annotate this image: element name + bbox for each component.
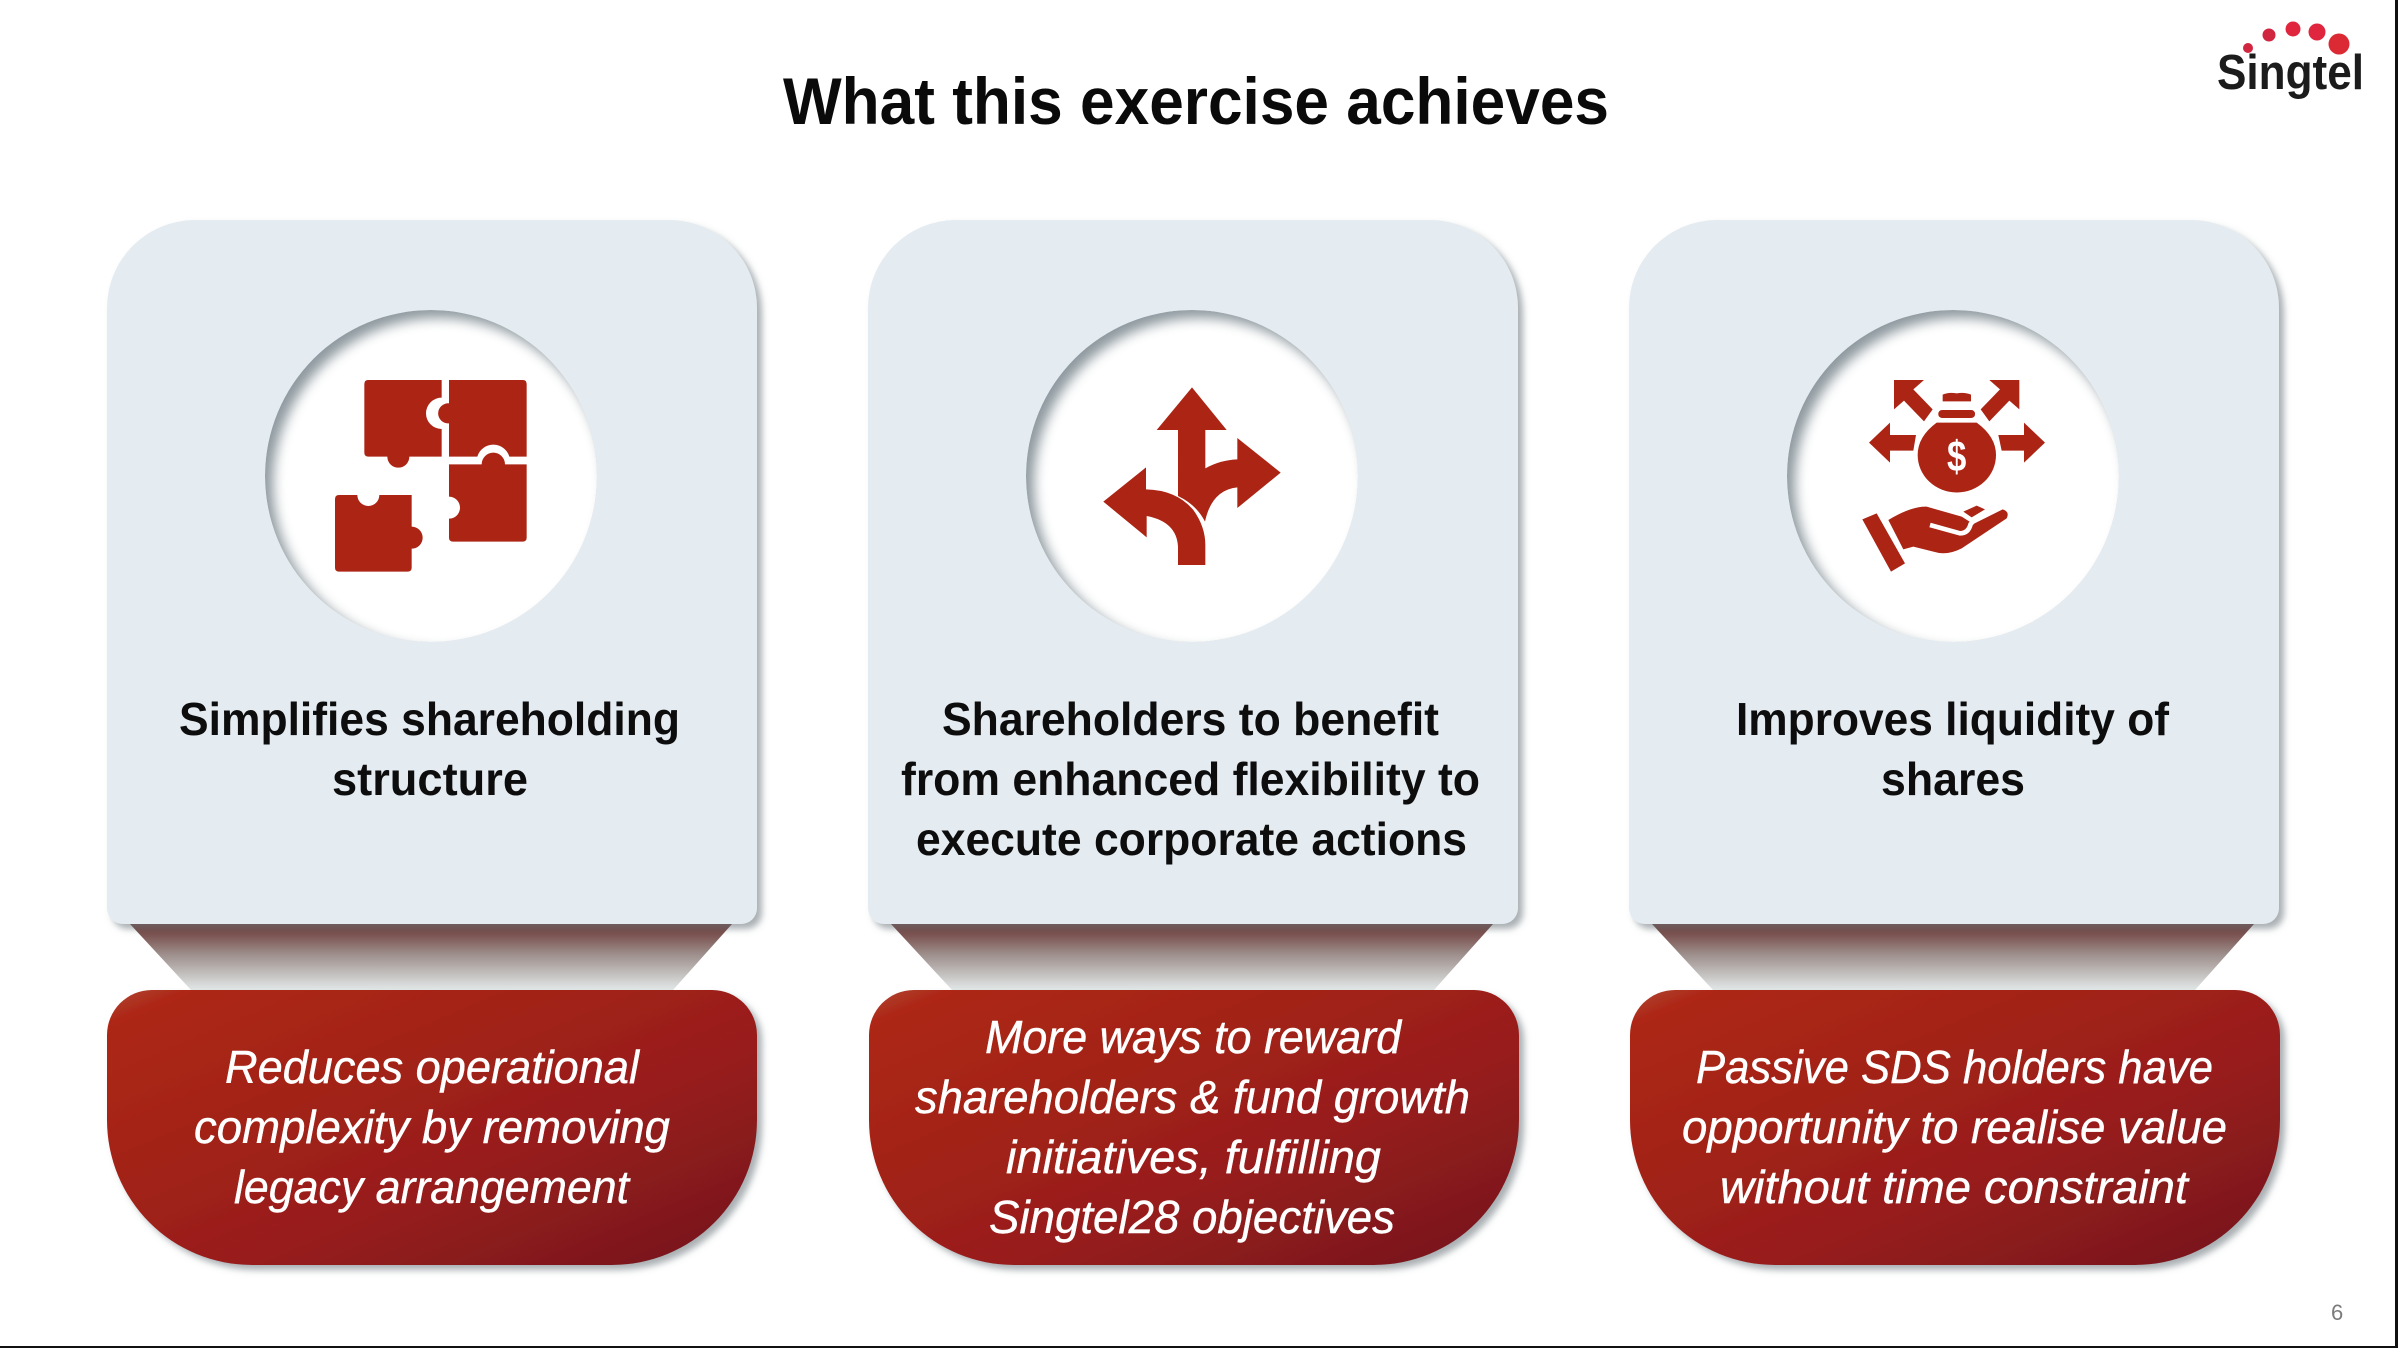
panel: improves liquidity [1629,220,2280,1265]
callout text 1 [194,1041,670,1213]
icon: three-way arrows [1103,387,1281,565]
callout text 2 [915,1011,1470,1243]
pill 1 [107,990,757,1265]
pill 2 [869,990,1519,1265]
icon circle 1 [265,310,605,650]
icon circle 3 [1787,310,2127,650]
title: What this exercise achieves [783,64,1609,138]
connector 1 [130,924,732,990]
icon: money bag and hand: $ [1947,433,1966,481]
callout text 2: shareholders & fund growth [915,1071,1470,1123]
callout text 1: Reduces operational [225,1041,641,1093]
card 2 [868,220,1518,924]
panel: simplifies shareholding structure [107,220,757,1265]
pill 3 [1630,990,2280,1265]
heading 1: Simplifies shareholding [179,693,680,745]
logo: Singtel [2217,22,2364,100]
heading 3: shares [1881,753,2025,805]
callout text 3 [1682,1041,2227,1213]
heading 2: from enhanced flexibility to [901,753,1480,805]
callout text 3: without time constraint [1720,1161,2190,1213]
heading 2: Shareholders to benefit [942,693,1439,745]
page number: 6 [2331,1300,2343,1325]
connector 3 [1652,924,2254,990]
card 3 [1629,220,2279,924]
heading 1 [179,693,680,805]
callout text 2: More ways to reward [985,1011,1402,1063]
callout text 3: opportunity to realise value [1682,1101,2227,1153]
panel: enhanced flexibility [868,220,1519,1265]
icon circle 2 [1026,310,1366,650]
heading 2 [901,693,1480,865]
heading 3: Improves liquidity of [1736,693,2170,745]
connector 2 [891,924,1493,990]
callout text 2: initiatives, fulfilling [1006,1131,1381,1183]
logo: Singtel: Singtel [2217,46,2364,100]
heading 1: structure [332,753,528,805]
icon: puzzle pieces [335,380,527,572]
card 1 [107,220,757,924]
callout text 1: legacy arrangement [234,1161,631,1213]
heading 3 [1736,693,2170,805]
icon: money bag and hand [1862,380,2045,572]
callout text 2: Singtel28 objectives [989,1191,1395,1243]
callout text 1: complexity by removing [194,1101,670,1153]
callout text 3: Passive SDS holders have [1696,1041,2213,1093]
heading 2: execute corporate actions [916,813,1467,865]
